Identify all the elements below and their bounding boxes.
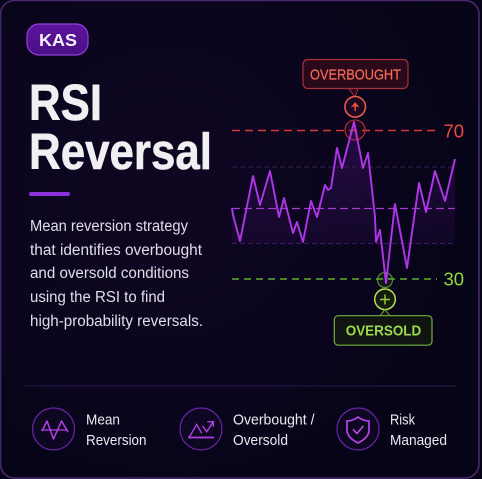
- feature: risk managed: [337, 408, 447, 450]
- title: [29, 74, 212, 180]
- reference line: upper band: [232, 166, 455, 168]
- icon: trend chart: [180, 408, 222, 450]
- callout: overbought: OVERBOUGHT: [310, 66, 401, 83]
- callout: oversold: OVERSOLD: [346, 324, 422, 340]
- label: 30: 30: [444, 269, 464, 290]
- label: Overbought /: [233, 412, 315, 428]
- description text: that identifies overbought: [30, 242, 203, 259]
- description text: Mean reversion strategy: [30, 218, 188, 235]
- reference line: 70 overbought: [232, 130, 437, 132]
- reference line: 30 oversold: [232, 278, 437, 280]
- feature: overbought / oversold: [180, 408, 315, 450]
- description text: using the RSI to find: [30, 289, 165, 306]
- label: [86, 412, 146, 449]
- description text: [30, 218, 203, 330]
- label: Oversold: [233, 432, 288, 449]
- label: [390, 412, 447, 449]
- reference line: midline: [232, 208, 455, 210]
- RSI chart: [232, 122, 455, 283]
- label: Reversion: [86, 432, 146, 449]
- title: RSI: [29, 74, 102, 131]
- icon: overbought up arrow: [345, 96, 366, 117]
- marker: oversold trough ring: [378, 272, 392, 288]
- callout: oversold: [334, 310, 432, 345]
- marker: overbought peak ring: [345, 120, 365, 140]
- feature: mean reversion: [32, 408, 146, 450]
- description text: and oversold conditions: [30, 265, 189, 282]
- footer divider: [23, 385, 456, 387]
- label: Risk: [390, 412, 415, 428]
- callout: overbought: [303, 60, 408, 97]
- reference line: lower band: [232, 242, 455, 244]
- title: Reversal: [29, 123, 212, 180]
- label: Managed: [390, 432, 447, 449]
- RSI line: [232, 122, 455, 283]
- icon: shield: [337, 408, 379, 450]
- area under RSI line: [232, 122, 455, 283]
- icon: oversold down arrow: [375, 289, 395, 310]
- badge: KAS: [27, 24, 88, 55]
- badge: KAS: KAS: [39, 30, 77, 50]
- icon: wave: [32, 408, 74, 450]
- label: [233, 412, 315, 449]
- label: Mean: [86, 412, 120, 428]
- label: 70: 70: [444, 120, 464, 141]
- description text: high-probability reversals.: [30, 313, 203, 330]
- title accent bar: [29, 192, 70, 196]
